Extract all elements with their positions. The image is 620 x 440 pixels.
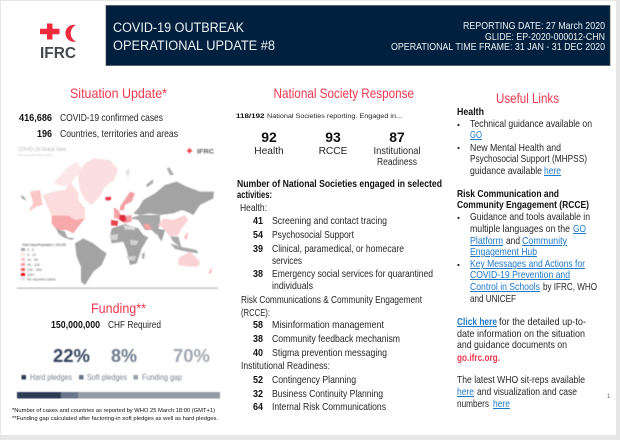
title: OPERATIONAL UPDATE #8: [113, 38, 275, 53]
stat: confirmed cases: [19, 113, 163, 124]
health links: New Mental Health and: [470, 143, 561, 154]
rcce activities: (RCCE):: [241, 308, 270, 319]
rcce activities: 38: [253, 334, 263, 345]
panel: useful links: [457, 90, 597, 410]
rcce activities: Community feedback mechanism: [272, 334, 400, 345]
stat: countries: 196: [37, 129, 52, 140]
rcce links: and UNICEF: [470, 294, 516, 305]
stat: institutional readiness: Institutional: [374, 146, 420, 157]
world map: [17, 147, 218, 289]
institutional readiness activities: Internal Risk Communications: [272, 402, 386, 413]
health links: Technical guidance available on: [470, 119, 592, 130]
world map: IFRC: [197, 150, 215, 156]
stat: health: [254, 129, 284, 157]
rcce links: Community Engagement (RCCE): [457, 200, 589, 211]
footnotes: **Funding gap calculated after factoring-in soft pledges as well as hard pledges.: [12, 416, 218, 422]
health activities: Clinical, paramedical, or homecare: [272, 244, 404, 255]
world map: COVID-19 Global View: [18, 147, 66, 153]
world map: Produced 26 March 2020: [18, 153, 52, 157]
stat: countries: Countries, territories and areas: [60, 129, 178, 140]
funding percentages: 8%: [111, 346, 137, 366]
panel: national society response: [236, 85, 442, 413]
institutional readiness activities: Business Continuity Planning: [272, 389, 383, 400]
panel: situation update: [17, 85, 218, 289]
stat: institutional readiness: 87: [389, 129, 405, 145]
who sit-reps note: and visualization and case: [477, 387, 577, 398]
logo: IFRC: [40, 24, 76, 62]
funding legend: Hard pledges: [30, 372, 72, 382]
title: COVID-19 OUTBREAK: [113, 20, 244, 35]
reporting details: [391, 21, 605, 53]
world map: No reported cases: [27, 278, 56, 282]
rcce links: and: [506, 236, 520, 247]
rcce links: multiple languages on the: [470, 224, 570, 235]
institutional readiness activities: 64: [253, 402, 263, 413]
rcce links: [457, 189, 597, 305]
stat: rcce: RCCE: [319, 146, 348, 157]
health activities: 41: [253, 216, 263, 227]
rcce activities: [241, 295, 422, 359]
health activities: 38: [253, 269, 263, 280]
title: [113, 20, 275, 53]
who sit-reps note: here: [493, 399, 510, 410]
stat: institutional readiness: Readiness: [377, 157, 417, 168]
funding legend: Funding gap: [142, 372, 182, 382]
rcce activities: Misinformation management: [272, 320, 384, 331]
world map: 0 - 3: [27, 248, 34, 252]
activities heading: Number of National Societies engaged in selected: [237, 179, 442, 190]
health links: Psychosocial Support (MHPSS): [470, 154, 587, 165]
who sit-reps note: [457, 375, 585, 410]
rcce links: Platform: [470, 236, 503, 247]
health links: guidance available: [470, 166, 542, 177]
rcce activities: Stigma prevention messaging: [272, 348, 387, 359]
stat: rcce: 93: [325, 129, 341, 145]
rcce links: Control in Schools: [470, 282, 540, 293]
health activities: Screening and contact tracing: [272, 216, 387, 227]
health activities: 39: [253, 244, 263, 255]
rcce links: Guidance and tools available in: [470, 212, 590, 223]
detailed information note: and guidance documents on: [457, 340, 567, 351]
stat: health: Health: [254, 146, 284, 157]
reporting details: REPORTING DATE: 27 March 2020: [463, 21, 605, 32]
stat: rcce: [319, 129, 348, 157]
detailed information note: Click here: [457, 317, 497, 328]
heading: funding: Funding**: [91, 300, 146, 316]
detailed information note: [457, 317, 586, 364]
health activities: Psychosocial Support: [272, 230, 354, 241]
logo: IFRC: IFRC: [40, 45, 76, 62]
detailed information note: go.ifrc.org.: [457, 353, 500, 364]
activities heading: activities:: [237, 190, 272, 201]
who sit-reps note: The latest WHO sit-reps available: [457, 375, 585, 386]
health activities: 54: [253, 230, 263, 241]
rcce activities: Risk Communications & Community Engagement: [241, 295, 422, 306]
health links: GO: [470, 130, 482, 141]
panel: funding: [17, 300, 220, 398]
funding required: [51, 320, 161, 331]
reporting details: GLIDE: EP-2020-000012-CHN: [485, 32, 605, 43]
funding bar: [17, 392, 220, 398]
funding legend: Soft pledges: [87, 372, 127, 382]
who sit-reps note: here: [457, 387, 474, 398]
footnotes: [12, 408, 218, 422]
health links: here: [544, 166, 561, 177]
reporting summary: National Societies reporting. Engaged in...: [267, 113, 402, 120]
health activities: services: [272, 256, 302, 267]
detailed information note: date information on the situation: [457, 329, 585, 340]
heading: useful links: Useful Links: [496, 90, 559, 106]
stat: confirmed cases: 416,686: [19, 113, 52, 124]
heading: situation update: Situation Update*: [70, 85, 167, 101]
page number: 1: [607, 394, 611, 400]
funding required: CHF Required: [108, 320, 161, 331]
institutional readiness activities: Institutional Readiness:: [241, 361, 330, 372]
rcce links: by IFRC, WHO: [543, 282, 597, 293]
world map: 10 - 45: [27, 258, 38, 262]
reporting summary: 118/192: [236, 113, 265, 120]
health activities: individuals: [272, 281, 313, 292]
header banner: [106, 6, 610, 66]
rcce links: Risk Communication and: [457, 189, 559, 200]
institutional readiness activities: Contingency Planning: [272, 375, 356, 386]
institutional readiness activities: [241, 361, 386, 413]
world map: 100 - 300: [27, 268, 42, 272]
rcce links: COVID-19 Prevention and: [470, 270, 570, 281]
funding percentages: [53, 346, 210, 366]
funding required: 150,000,000: [51, 320, 100, 331]
reporting summary: [236, 113, 402, 120]
activities heading: [237, 179, 442, 201]
health activities: [240, 203, 433, 292]
rcce links: Community: [522, 236, 568, 247]
world map: Total Cases/Population x 100,000: [22, 243, 66, 247]
world map: 3 - 10: [27, 253, 36, 257]
footnotes: *Number of cases and countries as reported by WHO 25 March 18:00 (GMT+1): [12, 408, 215, 414]
stat: confirmed cases: COVID-19 confirmed cases: [60, 113, 163, 124]
rcce links: Key Messages and Actions for: [470, 259, 586, 270]
rcce links: GO: [573, 224, 586, 235]
health activities: Health:: [240, 203, 267, 214]
rcce activities: 58: [253, 320, 263, 331]
funding percentages: 70%: [173, 346, 210, 366]
stat: institutional readiness: [374, 129, 420, 168]
health links: Health: [457, 107, 484, 118]
health links: [457, 107, 592, 177]
rcce activities: 40: [253, 348, 263, 359]
world map: 300+: [27, 273, 35, 277]
heading: national society response: National Society Response: [274, 85, 414, 101]
institutional readiness activities: 52: [253, 375, 263, 386]
world map: 45 - 100: [27, 263, 40, 267]
funding legend: [22, 372, 182, 382]
detailed information note: for the detailed up-to-: [499, 317, 586, 328]
who sit-reps note: numbers: [457, 399, 489, 410]
rcce links: Engagement Hub: [470, 247, 537, 258]
institutional readiness activities: 32: [253, 389, 263, 400]
health activities: Emergency social services for quarantined: [272, 269, 433, 280]
funding percentages: 22%: [53, 346, 90, 366]
stat: health: 92: [261, 129, 277, 145]
